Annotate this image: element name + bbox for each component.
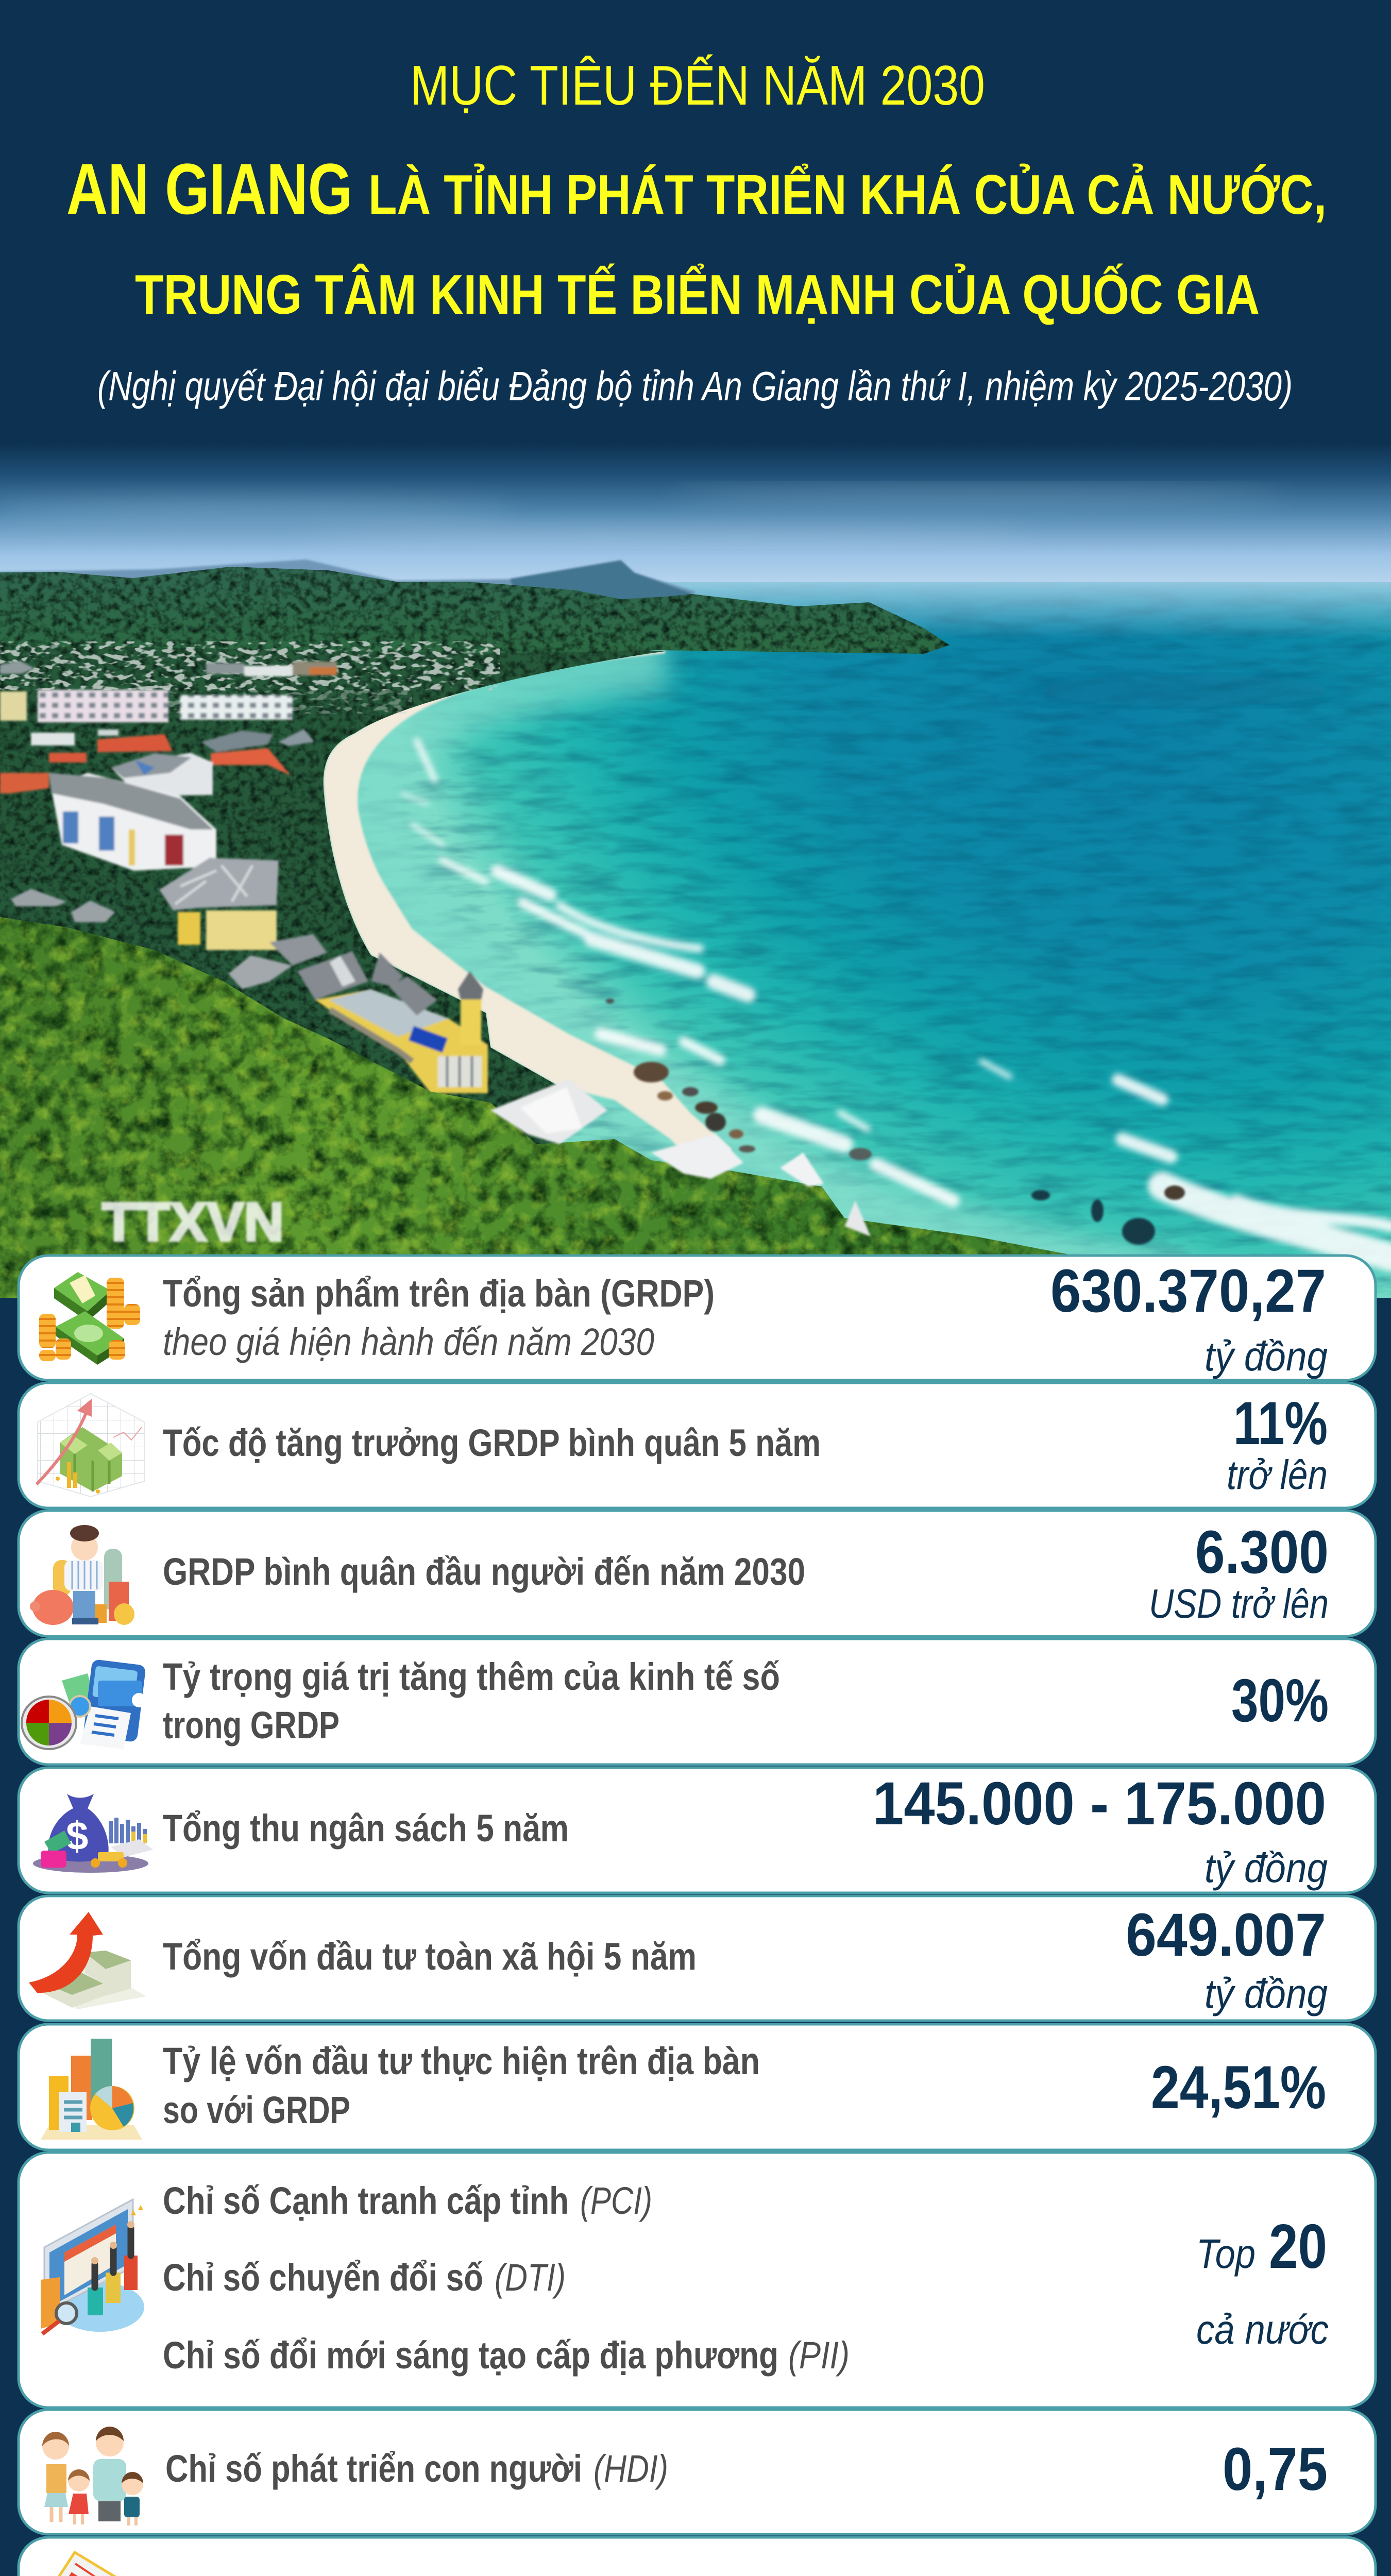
label: Tổng thu ngân sách 5 năm [163, 1807, 569, 1850]
panel: digital economy share [19, 1639, 1376, 1765]
value: tỷ đồng [1205, 1333, 1328, 1379]
value [1227, 1389, 1328, 1498]
labels: Chỉ số chuyển đổi số [163, 2256, 483, 2299]
value: 0,75 [1223, 2435, 1328, 2503]
panel: investment to GRDP ratio [19, 2024, 1376, 2150]
value: 649.007 [1126, 1901, 1326, 1969]
value: 630.370,27 [1050, 1257, 1326, 1325]
label: trong GRDP [163, 1704, 340, 1747]
label [163, 1655, 780, 1747]
labels: Chỉ số Cạnh tranh cấp tỉnh [163, 2179, 569, 2222]
value [1149, 1518, 1329, 1626]
labels: Chỉ số đổi mới sáng tạo cấp địa phương [163, 2334, 778, 2377]
title block [66, 54, 1327, 409]
value: cả nước [1196, 2307, 1329, 2352]
labels [163, 2179, 850, 2377]
panel: HDI [19, 2410, 1376, 2534]
value: trở lên [1227, 1452, 1328, 1498]
panel: budget revenue [19, 1768, 1376, 1893]
label: Tốc độ tăng trưởng GRDP bình quân 5 năm [163, 1421, 821, 1464]
value [1196, 2211, 1329, 2352]
value: Top [1196, 2231, 1256, 2277]
label [163, 1272, 715, 1363]
value [873, 1770, 1328, 1891]
icon: family [42, 2427, 143, 2526]
icon: money bag: $ [66, 1813, 88, 1858]
icon: bars and pie chart [41, 2039, 142, 2140]
label: so với GRDP [163, 2089, 350, 2131]
panel: GRDP growth [19, 1383, 1376, 1508]
label: Tổng vốn đầu tư toàn xã hội 5 năm [163, 1935, 697, 1978]
icon: money and coins [39, 1272, 140, 1365]
label [163, 2040, 760, 2131]
labels: (DTI) [495, 2256, 566, 2299]
value: 20 [1269, 2211, 1327, 2281]
hero photo: An Giang coastline [0, 443, 1391, 1298]
icon: pie chart and phone payment [22, 1659, 146, 1749]
panel: GRDP [19, 1256, 1376, 1380]
panel: PCI, DTI, PII indices [19, 2153, 1376, 2408]
panel: trained workforce [19, 2537, 1376, 2576]
value: tỷ đồng [1205, 1845, 1328, 1891]
labels: (PII) [788, 2334, 850, 2377]
label: GRDP bình quân đầu người đến năm 2030 [163, 1550, 805, 1593]
value [1050, 1257, 1328, 1379]
icon: certificate in hand [31, 2552, 131, 2576]
labels: (PCI) [580, 2179, 652, 2222]
value: 145.000 - 175.000 [873, 1770, 1326, 1838]
value: 30% [1231, 1667, 1329, 1735]
value [1126, 1901, 1328, 2016]
kicker line: MỤC TIÊU ĐẾN NĂM 2030 [410, 54, 985, 117]
icon: person, piggy bank and bars [30, 1525, 134, 1625]
label: Tỷ trọng giá trị tăng thêm của kinh tế số [163, 1655, 780, 1698]
label: Chỉ số phát triển con người [165, 2447, 582, 2490]
value: USD trở lên [1149, 1581, 1329, 1626]
headline line 1 [66, 148, 1327, 229]
value: 24,51% [1151, 2054, 1326, 2122]
icon: red arrow over money stacks [29, 1912, 146, 2009]
value: tỷ đồng [1205, 1971, 1328, 2016]
photo watermark: TTXVN [102, 1192, 284, 1252]
icon: ranking dashboard [41, 2199, 144, 2334]
label: Tổng sản phẩm trên địa bàn (GRDP) [163, 1272, 715, 1315]
icon: growth chart with money [37, 1394, 144, 1497]
headline line 1: AN GIANG [66, 148, 352, 229]
icon: money bag [33, 1794, 153, 1873]
label: Tỷ lệ vốn đầu tư thực hiện trên địa bàn [163, 2040, 760, 2082]
label: theo giá hiện hành đến năm 2030 [163, 1320, 654, 1363]
value: 6.300 [1195, 1518, 1329, 1586]
panel: total investment [19, 1896, 1376, 2021]
value: 11% [1233, 1389, 1328, 1458]
panel: GRDP per capita [19, 1511, 1376, 1636]
label: (HDI) [593, 2447, 668, 2490]
